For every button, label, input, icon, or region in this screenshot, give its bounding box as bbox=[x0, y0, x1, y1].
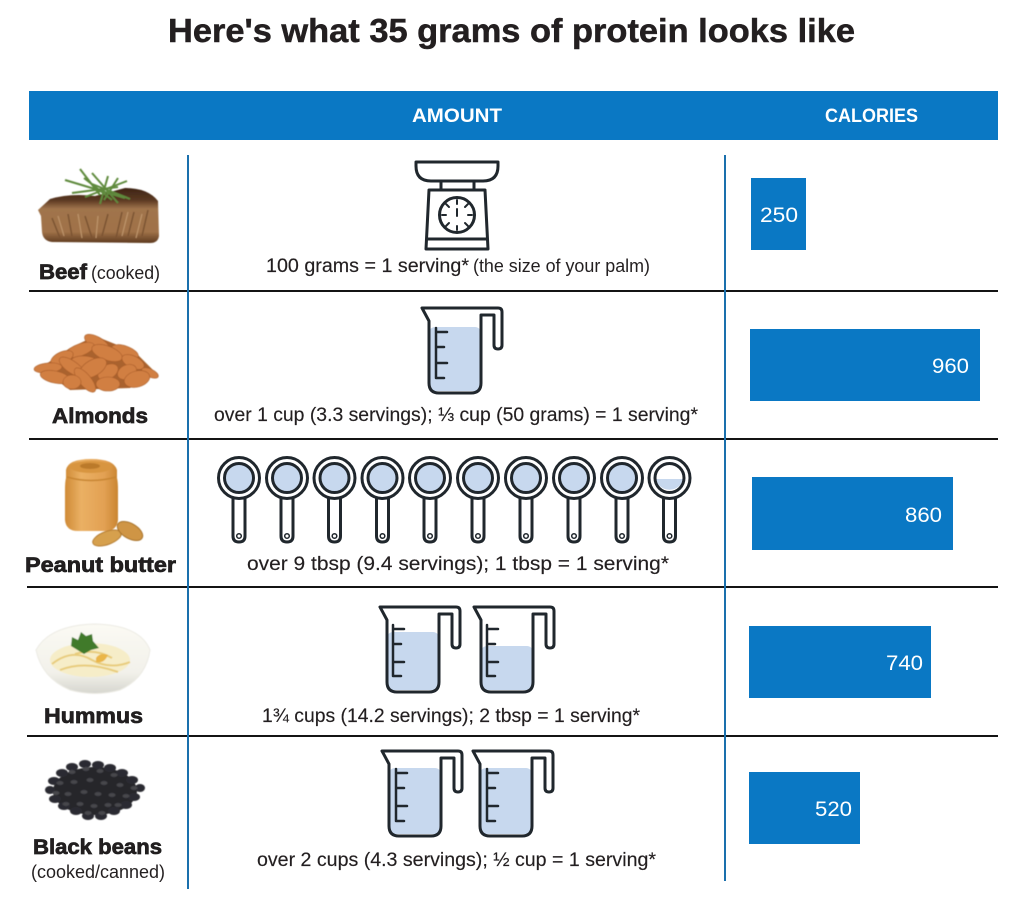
food label: Beef bbox=[39, 261, 88, 284]
row: black beans bbox=[31, 751, 860, 882]
amount text: 100 grams = 1 serving* bbox=[266, 256, 470, 277]
calorie bar: 740 bbox=[749, 626, 931, 698]
header: amount: AMOUNT bbox=[412, 106, 502, 127]
icon: peanut butter jar bbox=[65, 459, 146, 549]
food label: Black beans bbox=[33, 836, 162, 859]
row: almonds bbox=[34, 308, 980, 428]
calorie bar: 860: 860 bbox=[905, 504, 942, 527]
food label: Hummus bbox=[44, 705, 143, 728]
amount text: over 1 cup (3.3 servings); ⅓ cup (50 grams) = 1 serving* bbox=[214, 405, 699, 426]
amount text: over 9 tbsp (9.4 servings); 1 tbsp = 1 serving* bbox=[247, 554, 670, 575]
calorie bar: 520: 520 bbox=[815, 798, 852, 821]
calorie bar: 960 bbox=[750, 329, 980, 401]
row: peanut butter bbox=[25, 458, 953, 577]
icon: measuring jug bbox=[422, 308, 502, 393]
title: Here's what 35 grams of protein looks like bbox=[168, 12, 855, 49]
calorie bar: 740: 740 bbox=[886, 652, 923, 675]
icon: two measuring jugs bbox=[380, 607, 554, 692]
amount text: over 2 cups (4.3 servings); ½ cup = 1 serving* bbox=[257, 850, 657, 871]
amount note: (the size of your palm) bbox=[473, 256, 650, 276]
row: beef bbox=[38, 162, 806, 284]
food label: Almonds bbox=[52, 405, 148, 428]
icon: kitchen scale bbox=[416, 162, 498, 249]
amount text: 1¾ cups (14.2 servings); 2 tbsp = 1 serving* bbox=[262, 706, 641, 727]
table header bar bbox=[29, 91, 998, 140]
icon: hummus bowl bbox=[36, 624, 150, 694]
icon: steak with rosemary bbox=[38, 169, 159, 243]
calorie bar: 960: 960 bbox=[932, 355, 969, 378]
icon: black beans pile bbox=[45, 760, 145, 820]
icon: almonds pile bbox=[34, 331, 160, 395]
calorie bar: 520 bbox=[749, 772, 860, 844]
food label: Peanut butter bbox=[25, 554, 176, 577]
column divider lines bbox=[188, 155, 725, 889]
food note: (cooked) bbox=[91, 263, 160, 283]
calorie bar: 250: 250 bbox=[760, 204, 798, 227]
icon: two measuring jugs bbox=[382, 751, 553, 836]
header: calories: CALORIES bbox=[825, 106, 918, 127]
row divider lines bbox=[27, 291, 998, 736]
calorie bar: 860 bbox=[752, 477, 953, 550]
calorie bar: 250 bbox=[751, 178, 806, 250]
food note: (cooked/canned) bbox=[31, 862, 165, 882]
icon: row of ten measuring spoons bbox=[218, 458, 690, 542]
row: hummus bbox=[36, 607, 931, 728]
